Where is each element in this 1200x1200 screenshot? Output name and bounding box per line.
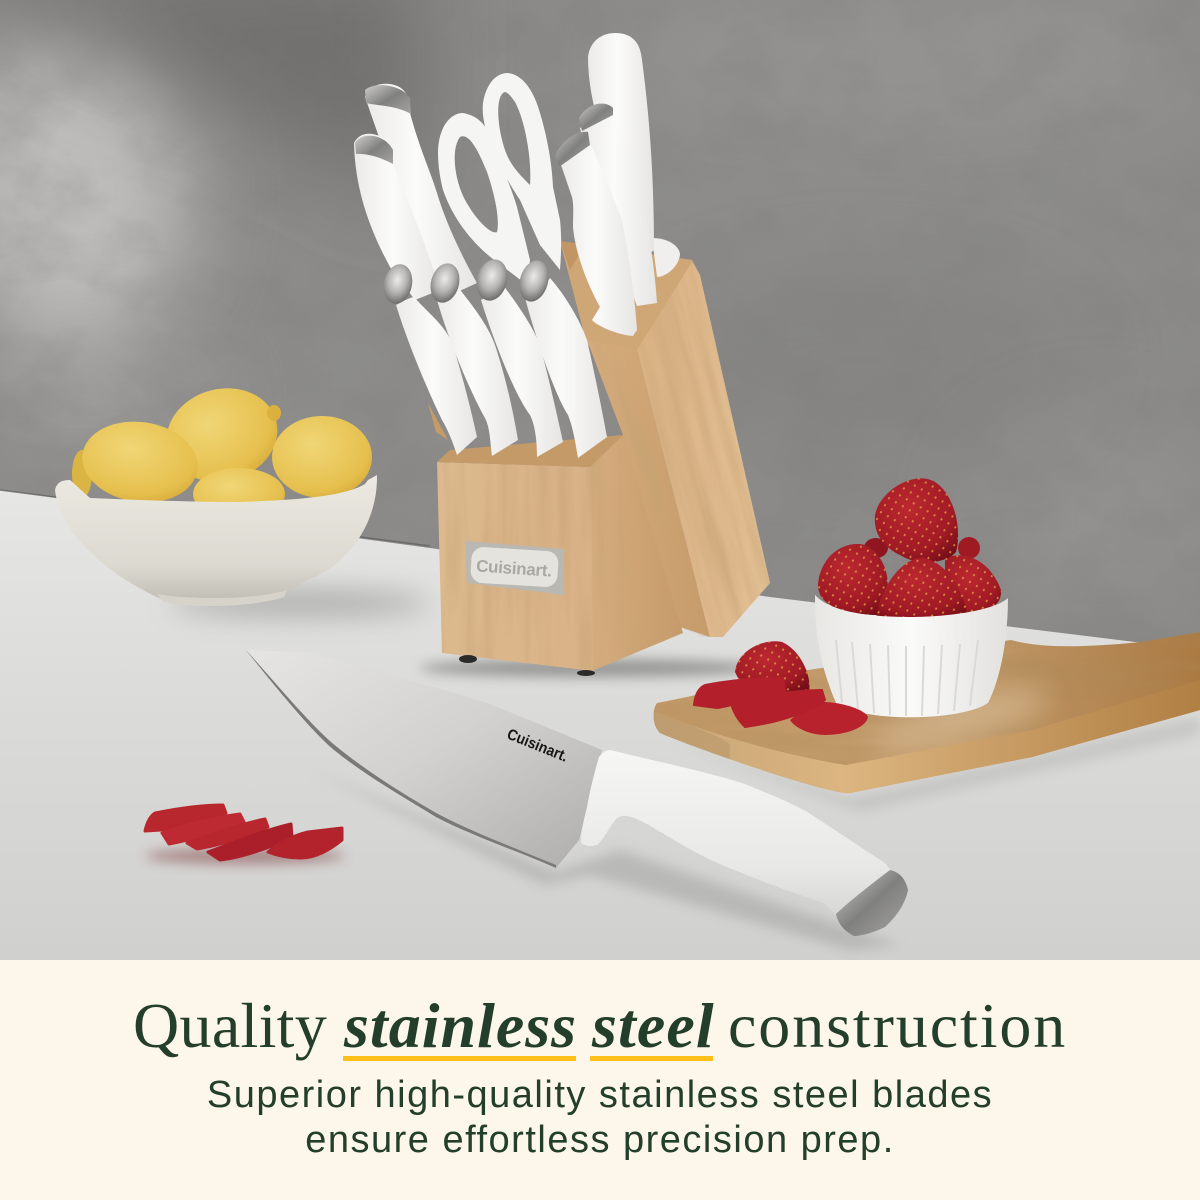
wall-counter seam line [0,490,430,546]
knife block [428,241,770,676]
cutting board [650,625,1200,800]
strawberries on board [694,641,868,735]
bowl foot [157,590,287,606]
lemons [72,376,372,520]
product photo scene [0,0,1200,960]
front row knife 4 [515,257,607,458]
blade logo: Cuisinart. [505,726,570,766]
subtitle text: Superior high-quality stainless steel blades [207,1074,993,1116]
front row knife 2 [426,260,518,456]
title [133,990,1067,1061]
ramekin [815,595,1008,717]
subtitle text [207,1074,993,1161]
front row knife 1 [380,262,477,455]
blade [245,649,602,868]
bowl of lemons [55,376,377,606]
front block top [437,435,623,467]
scissors [438,73,561,285]
concrete wall [0,0,1200,660]
slivers of block behind front knives [428,403,448,440]
front block face [437,462,593,671]
chef's knife [245,649,908,936]
steel end cap [836,870,908,936]
slice 2 [731,690,825,727]
front block side [590,435,683,671]
white knives in back slots [354,33,680,458]
shadows on counter [145,591,1200,950]
subtitle text: ensure effortless precision prep. [305,1119,895,1161]
ramekin of strawberries [815,478,1008,717]
strawberries [818,478,1001,620]
handle [581,750,892,917]
caption panel [0,960,1200,1200]
bowl body [55,475,377,605]
logo plate: Cuisinart. [476,556,553,581]
upper left handles [354,84,477,300]
tall rear handle [588,33,680,277]
slice 1 [694,678,785,708]
title: stainless [344,990,577,1061]
countertop [0,490,1200,960]
title: Quality [133,990,327,1061]
title: construction [728,990,1067,1061]
front row knife 3 [472,256,563,457]
strawberry slices on counter [145,805,342,860]
whole strawberry [735,641,809,692]
right handles [555,103,657,336]
slice 3 [790,702,868,735]
base feet [459,655,595,676]
back tilted block [561,241,770,637]
logo plate [465,541,564,595]
title: steel [592,990,715,1061]
